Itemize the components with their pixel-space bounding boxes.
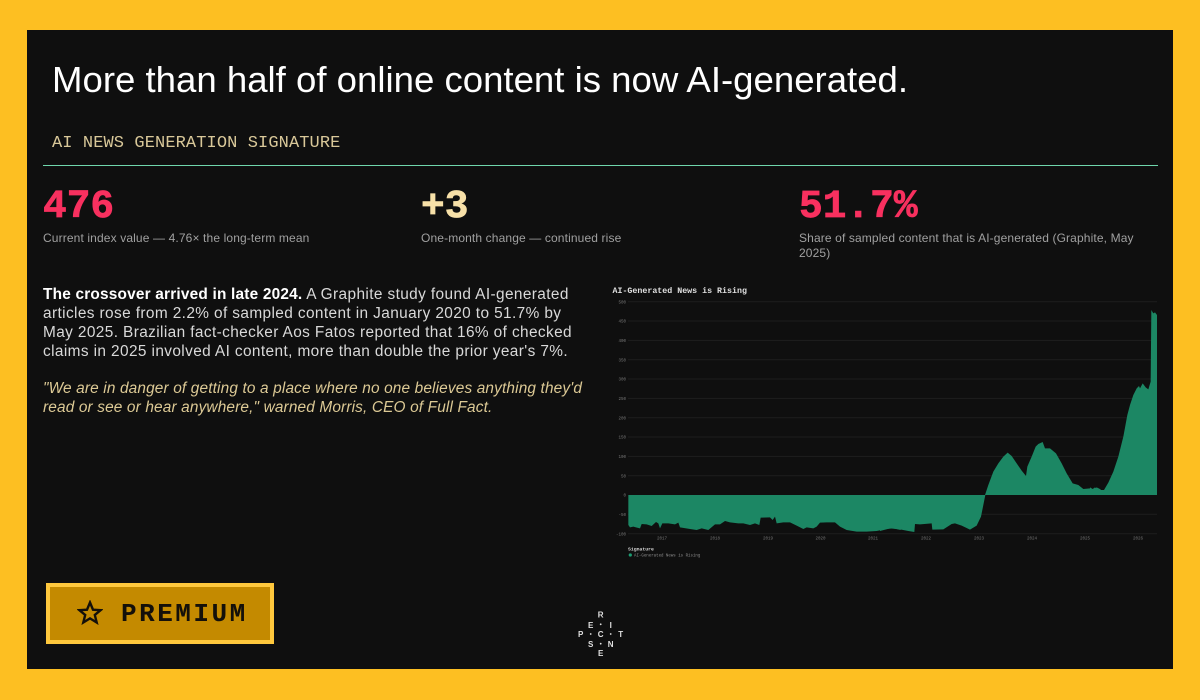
logo: cross of letters: S bbox=[588, 640, 594, 649]
logo: cross of letters: R bbox=[598, 611, 604, 620]
y axis labels: 0 bbox=[623, 495, 626, 499]
logo: cross of letters: C bbox=[598, 630, 604, 639]
text block: crossover findings: claims in 2025 involved AI content, more than double the prior year's 7%. bbox=[43, 343, 568, 360]
logo: cross of letters: N bbox=[608, 640, 614, 649]
stat caption: AI share: Share of sampled content that is AI-generated (Graphite, May bbox=[799, 231, 1134, 245]
section heading: AI NEWS GENERATION SIGNATURE bbox=[52, 134, 340, 153]
y axis labels bbox=[616, 301, 626, 537]
text block: Morris quote: "We are in danger of getting to a place where no one believes anything they'd bbox=[43, 380, 582, 396]
x axis labels bbox=[657, 538, 1144, 542]
text block: crossover findings: articles rose from 2.2% of sampled content in January 2020 to 51.7% by bbox=[43, 305, 561, 322]
stat caption: index value: Current index value — 4.76× the long-term mean bbox=[43, 231, 309, 245]
stat: AI share: 51.7% bbox=[799, 184, 918, 229]
title: More than half of online content is now AI-generated. bbox=[52, 59, 908, 100]
area series bbox=[628, 310, 1157, 532]
legend bbox=[628, 546, 701, 559]
text block: crossover findings: The crossover arrived in late 2024. A Graphite study found AI-generated bbox=[43, 286, 569, 302]
stat caption: AI share: 2025) bbox=[799, 246, 830, 260]
x axis labels: 2022 bbox=[921, 538, 932, 542]
x axis labels: 2020 bbox=[815, 538, 826, 542]
area chart: AI-Generated News is Rising bbox=[612, 286, 1157, 559]
text block: crossover findings: May 2025. Brazilian fact-checker Aos Fatos reported that 16% of checked bbox=[43, 324, 572, 341]
badge: premium bbox=[46, 583, 274, 644]
x axis labels: 2021 bbox=[868, 538, 879, 542]
icon: star bbox=[77, 600, 103, 625]
y axis labels: 300 bbox=[618, 379, 626, 383]
badge label: PREMIUM bbox=[121, 599, 248, 629]
y axis labels: 50 bbox=[621, 475, 626, 479]
y axis labels: 150 bbox=[618, 437, 626, 441]
x axis labels: 2024 bbox=[1027, 538, 1038, 542]
chart title: AI-Generated News is Rising bbox=[612, 286, 747, 296]
gridlines bbox=[628, 302, 1157, 534]
x axis labels: 2025 bbox=[1080, 538, 1091, 542]
text block: Morris quote bbox=[43, 380, 582, 416]
logo: cross of letters: E bbox=[588, 621, 594, 630]
divider bbox=[43, 165, 1158, 166]
text block: Morris quote: read or see or hear anywhere," warned Morris, CEO of Full Fact. bbox=[43, 399, 492, 416]
x axis labels: 2026 bbox=[1133, 538, 1144, 542]
y axis labels: 200 bbox=[618, 417, 626, 421]
logo: cross of letters: I bbox=[610, 621, 612, 630]
x axis labels: 2018 bbox=[710, 538, 721, 542]
y axis labels: 450 bbox=[618, 321, 626, 325]
logo: cross of letters bbox=[578, 611, 624, 658]
stat: one-month change: +3 bbox=[421, 184, 468, 229]
stat caption: AI share bbox=[799, 231, 1134, 260]
y axis labels: 250 bbox=[618, 398, 626, 402]
legend: AI-Generated News is Rising bbox=[634, 554, 701, 559]
logo: cross of letters: E bbox=[598, 649, 604, 658]
y axis labels: 500 bbox=[618, 301, 626, 305]
logo: cross of letters: P bbox=[578, 630, 584, 639]
y axis labels: 350 bbox=[618, 359, 626, 363]
y axis labels: -100 bbox=[616, 533, 626, 537]
y axis labels: 400 bbox=[618, 340, 626, 344]
text block: crossover findings bbox=[43, 286, 572, 360]
x axis labels: 2019 bbox=[763, 538, 774, 542]
stat caption: one-month change: One-month change — continued rise bbox=[421, 231, 621, 245]
y axis labels: -50 bbox=[618, 514, 626, 518]
y axis labels: 100 bbox=[618, 456, 626, 460]
logo: cross of letters: T bbox=[618, 630, 623, 639]
legend: Signature bbox=[628, 546, 654, 552]
x axis labels: 2023 bbox=[974, 538, 985, 542]
x axis labels: 2017 bbox=[657, 538, 668, 542]
stat: index value: 476 bbox=[43, 184, 114, 229]
